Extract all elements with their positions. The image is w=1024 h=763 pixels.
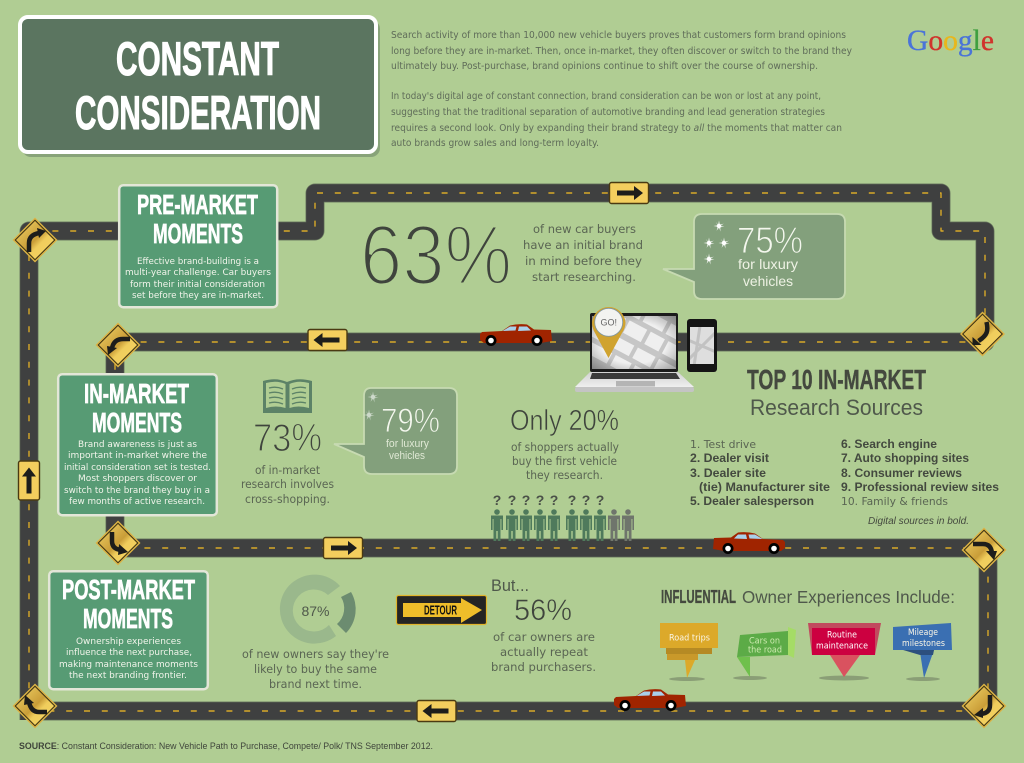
- 56% caption: [491, 630, 596, 674]
- heading: top 10 in-market research sources: [747, 364, 926, 420]
- sign: turn right bottom: [962, 684, 1006, 728]
- pre-market body: [125, 257, 271, 301]
- only 20% caption: of shoppers actually: [511, 440, 619, 454]
- arrow sign: lower road right: [324, 538, 362, 558]
- ribbon: road trips: Road trips: [669, 634, 710, 644]
- 73% caption: [241, 463, 334, 506]
- 56% caption: actually repeat: [500, 645, 588, 659]
- pre-market body: set before they are in-market.: [132, 291, 264, 301]
- panel: post-market moments: [49, 571, 208, 689]
- list: research sources: 8. Consumer reviews: [841, 466, 962, 480]
- list: research sources: 7. Auto shopping sites: [841, 451, 969, 465]
- callout: 75% luxury vehicles: for luxury: [738, 256, 798, 272]
- stat: but 56%: But...: [491, 576, 529, 595]
- intro text: suggesting that the traditional separation of automotive branding and lead generation strategies: [391, 107, 825, 118]
- heading: top 10 in-market research sources: Research Sources: [750, 395, 923, 420]
- car: middle road: [480, 324, 552, 346]
- list: research sources: 5. Dealer salesperson: [690, 494, 814, 508]
- phone: [687, 319, 717, 372]
- list: research sources: 3. Dealer site: [690, 466, 766, 480]
- list: research sources: 10. Family & friends: [841, 495, 948, 508]
- list: research sources: 9. Professional review sites: [841, 480, 999, 494]
- list: research sources: 2. Dealer visit: [690, 451, 769, 465]
- road network: [29, 193, 988, 720]
- chart: 87% donut: [280, 575, 356, 644]
- ribbon: cars on the road: the road: [748, 646, 782, 656]
- intro text: Search activity of more than 10,000 new vehicle buyers proves that customers form brand opinions: [391, 30, 846, 41]
- list: research sources: [690, 437, 999, 527]
- detour sign: [396, 596, 486, 624]
- ribbon: cars on the road: Cars on: [749, 636, 780, 646]
- icon: people with question marks: ?: [550, 492, 558, 508]
- pre-market body: Effective brand-building is a: [137, 257, 259, 267]
- 56% caption: of car owners are: [493, 630, 595, 644]
- icon: people with question marks: ?: [493, 492, 501, 508]
- 87% caption: [242, 647, 389, 691]
- only 20% caption: buy the first vehicle: [512, 454, 617, 468]
- intro text: auto brands grow sales and long-term loyalty.: [391, 138, 599, 149]
- panel: pre-market moments: [119, 185, 277, 307]
- 73% caption: research involves: [241, 477, 334, 491]
- sign: turn in-market road: [96, 520, 140, 566]
- icon: people with question marks: ?: [536, 492, 544, 508]
- callout: 75% luxury vehicles: vehicles: [743, 273, 793, 289]
- stat: but 56%: [491, 576, 596, 674]
- ribbon: road trips: [660, 623, 718, 681]
- pre-market heading: [137, 189, 258, 249]
- Google logo: Google: [907, 24, 994, 57]
- 63% caption: have an initial brand: [523, 238, 643, 252]
- icon: people with question marks: ?: [596, 492, 604, 508]
- intro text: [391, 30, 852, 149]
- ribbon: mileage milestones: [893, 623, 952, 681]
- post-market body: the next branding frontier.: [69, 671, 187, 681]
- sign: turn right top: [960, 312, 1005, 356]
- callout: 79% luxury vehicles: for luxury: [386, 438, 429, 450]
- stat: but 56%: 56%: [514, 594, 572, 627]
- post-market body: [59, 637, 198, 681]
- 73% caption: cross-shopping.: [245, 492, 330, 506]
- in-market heading: MOMENTS: [92, 407, 182, 438]
- in-market body: Most shoppers discover or: [78, 474, 197, 484]
- 63% caption: of new car buyers: [533, 222, 636, 236]
- 56% caption: brand purchasers.: [491, 660, 596, 674]
- in-market heading: [84, 378, 189, 438]
- icon: people with question marks: ?: [568, 492, 576, 508]
- title panel: [20, 17, 380, 157]
- laptop with map: [575, 313, 694, 392]
- 63% caption: [523, 222, 643, 284]
- list: research sources: (tie) Manufacturer site: [699, 480, 830, 494]
- pre-market heading: MOMENTS: [153, 218, 243, 249]
- panel: in-market moments: [58, 374, 217, 515]
- car: bottom road: [614, 689, 686, 711]
- intro text: long before they are in-market. Then, once in-market, they often discover or switch to the brand they: [391, 46, 852, 57]
- only 20% caption: [511, 440, 619, 482]
- stat: 63%: 63%: [360, 208, 512, 302]
- stat: only 20%: [510, 405, 619, 482]
- callout: 75% luxury vehicles: 75%: [737, 220, 803, 261]
- arrow sign: top road right: [610, 182, 648, 204]
- in-market body: important in-market where the: [68, 451, 207, 461]
- sign: turn pre-market road: [96, 322, 140, 368]
- in-market body: switch to the brand they buy in a: [64, 486, 210, 496]
- pre-market heading: PRE-MARKET: [137, 189, 258, 220]
- title text: CONSTANT: [116, 32, 279, 85]
- list: research sources: 6. Search engine: [841, 437, 937, 451]
- post-market heading: POST-MARKET: [62, 574, 195, 605]
- 87% caption: brand next time.: [269, 677, 362, 691]
- intro text: requires a second look. Only by expanding their brand strategy to all the moments that matter can: [391, 123, 842, 134]
- heading: influential owner experiences: INFLUENTIAL: [661, 587, 736, 607]
- list: research sources: 1. Test drive: [690, 438, 756, 451]
- callout: 75% luxury vehicles: [663, 214, 845, 299]
- list: research sources: Digital sources in bold.: [868, 516, 969, 527]
- ribbon: routine maintenance: Routine: [827, 630, 857, 640]
- icon: people with question marks: ?: [508, 492, 516, 508]
- icon: people with question marks: ?: [522, 492, 530, 508]
- 87% caption: likely to buy the same: [254, 662, 377, 676]
- post-market body: Ownership experiences: [76, 637, 181, 647]
- intro text: In today's digital age of constant connection, brand consideration can be won or lost at any point,: [391, 91, 821, 102]
- icon: GO! map pin: [592, 307, 626, 358]
- chart: 87% donut: 87%: [301, 603, 330, 619]
- icon: open book: [263, 379, 312, 413]
- stat: only 20%: Only 20%: [510, 405, 619, 437]
- in-market body: [64, 440, 211, 507]
- heading: influential owner experiences: Owner Experiences Include:: [742, 587, 955, 607]
- stat: 73%: 73%: [253, 417, 322, 460]
- post-market heading: [62, 574, 195, 634]
- source note: SOURCE: Constant Consideration: New Vehicle Path to Purchase, Compete/ Polk/ TNS September 2012.: [19, 741, 433, 752]
- arrow sign: left road up: [18, 461, 40, 500]
- in-market body: initial consideration set is tested.: [64, 463, 211, 473]
- title text: [75, 32, 321, 139]
- arrow sign: bottom road left: [417, 700, 456, 722]
- sign: turn bottom left: [12, 684, 58, 728]
- car: lower road: [713, 532, 785, 554]
- pre-market body: form their initial consideration: [130, 280, 265, 290]
- ribbon: routine maintenance: maintenance: [816, 642, 868, 652]
- sign: turn right middle: [962, 528, 1006, 572]
- icon: people with question marks: [491, 492, 634, 541]
- title text: CONSIDERATION: [75, 86, 321, 139]
- detour sign: DETOUR: [424, 602, 457, 618]
- intro text: ultimately buy. Post-purchase, brand opinions continue to shift over the course of ownership.: [391, 61, 818, 72]
- icon: GO! map pin: GO!: [600, 318, 617, 328]
- sign: turn top left: [12, 218, 58, 262]
- arrow sign: middle road left: [308, 330, 347, 350]
- 87% caption: of new owners say they're: [242, 647, 389, 661]
- in-market heading: IN-MARKET: [84, 378, 189, 409]
- icon: sparkles: [704, 220, 730, 264]
- ribbon: routine maintenance: [808, 623, 881, 680]
- icon: sparkles: [364, 392, 378, 420]
- stat: 63%: [360, 208, 643, 302]
- heading: top 10 in-market research sources: TOP 10 IN-MARKET: [747, 364, 926, 395]
- 63% caption: in mind before they: [525, 254, 642, 268]
- ribbon: mileage milestones: Mileage: [908, 628, 938, 638]
- only 20% caption: they research.: [526, 468, 603, 482]
- callout: 79% luxury vehicles: 79%: [381, 402, 440, 440]
- in-market body: few months of active research.: [69, 497, 205, 507]
- icon: people with question marks: ?: [582, 492, 590, 508]
- 63% caption: start researching.: [532, 270, 636, 284]
- post-market body: influence the next purchase,: [66, 648, 192, 658]
- post-market heading: MOMENTS: [83, 603, 173, 634]
- ribbon: mileage milestones: milestones: [902, 639, 945, 649]
- post-market body: making maintenance moments: [59, 660, 198, 670]
- ribbon: cars on the road: [733, 627, 796, 680]
- callout: 79% luxury vehicles: [334, 388, 457, 474]
- 73% caption: of in-market: [255, 463, 320, 477]
- pre-market body: multi-year challenge. Car buyers: [125, 268, 271, 278]
- callout: 79% luxury vehicles: vehicles: [389, 450, 425, 462]
- in-market body: Brand awareness is just as: [78, 440, 197, 450]
- stat: 73%: [241, 417, 334, 506]
